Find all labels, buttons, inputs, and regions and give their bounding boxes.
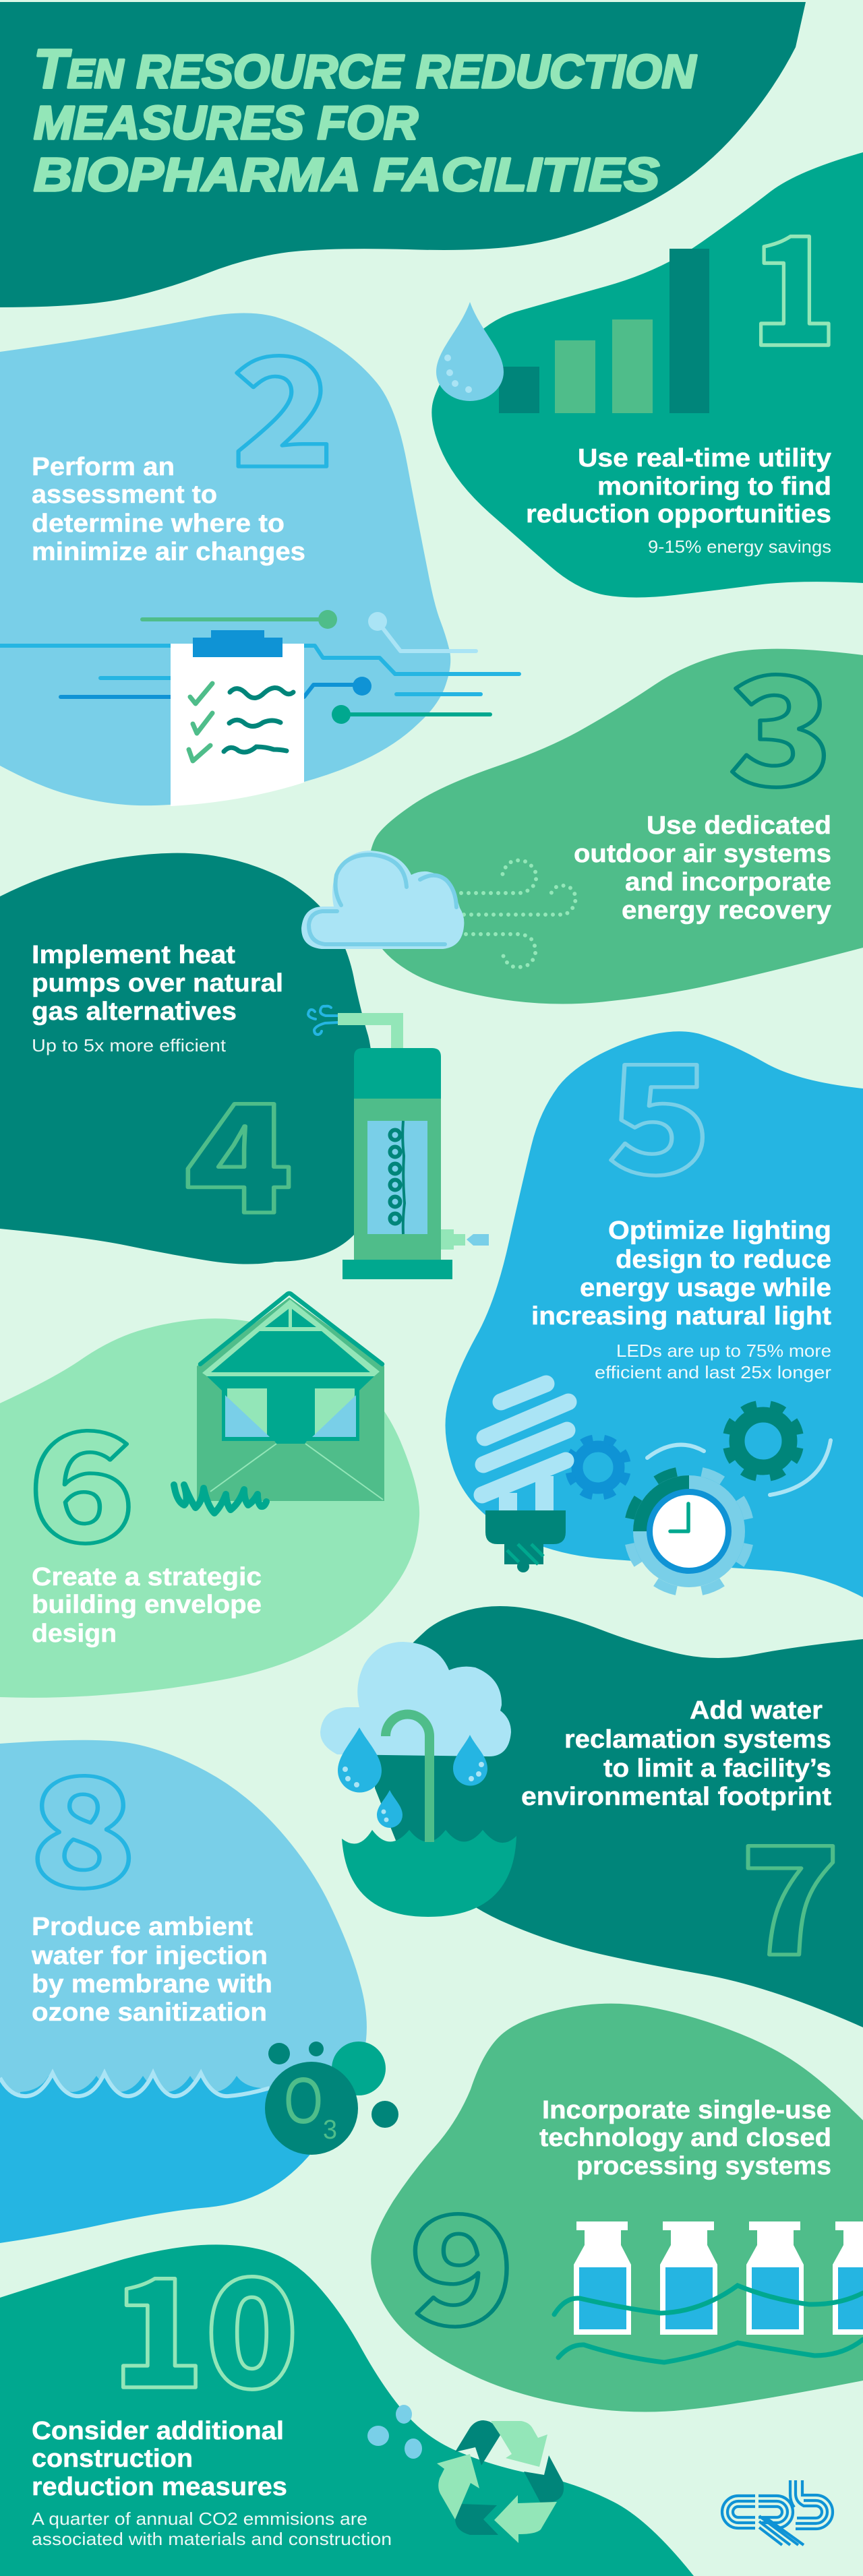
icon: vials (574, 2221, 863, 2335)
icon: wavy fluid lines (554, 2286, 863, 2362)
subtext 4: Up to 5x more efficient (32, 1035, 227, 1055)
heading 3 (574, 811, 831, 925)
heading 7: environmental footprint (521, 1783, 831, 1811)
panel: measure 8 (0, 1713, 398, 2243)
icon: dotted air flow (461, 860, 575, 967)
subtext 1: 9-15% energy savings (648, 536, 831, 557)
number 3: 3 (728, 611, 833, 828)
blob 10 (0, 2244, 694, 2576)
icon: light bulb (482, 1384, 568, 1572)
title: TEN RESOURCE REDUCTION (34, 38, 696, 100)
blob 7 (375, 1606, 863, 2027)
icon: grass scribble (174, 1485, 266, 1513)
icon: cloud (301, 851, 464, 949)
heading 1: Use real-time utility (578, 444, 831, 472)
icon: gears and clock (569, 1405, 831, 1592)
heading 6: Create a strategic (32, 1563, 262, 1591)
blob 4 (0, 853, 378, 1264)
subtext 10: A quarter of annual CO2 emmisions are (32, 2509, 367, 2529)
title: MEASURES FOR (34, 96, 418, 149)
icon: air swirl (308, 1006, 338, 1035)
panel: measure 5 (445, 1000, 863, 1597)
icon: ozone bubbles: O (284, 2064, 323, 2137)
heading 8: by membrane with (32, 1970, 272, 1998)
heading 7: Add water (690, 1696, 823, 1725)
subtext 10 (32, 2509, 392, 2549)
heading 4: gas alternatives (32, 998, 237, 1026)
icon: heat pump (338, 1013, 489, 1279)
water wave line (0, 2073, 270, 2096)
heading 8: ozone sanitization (32, 1998, 267, 2027)
icon: clipboard checklist (171, 630, 304, 806)
icon: ozone bubbles: 3 (323, 2115, 337, 2145)
heading 1: reduction opportunities (526, 500, 831, 528)
number 7: 7 (740, 1781, 841, 1998)
number 5: 5 (607, 1000, 712, 1217)
blob 1 (432, 152, 863, 597)
heading 7: to limit a facility’s (603, 1754, 831, 1783)
heading 4: Implement heat (32, 941, 235, 969)
heading 5: design to reduce (616, 1246, 831, 1274)
heading 7: reclamation systems (564, 1725, 831, 1754)
blob 5 (445, 1031, 863, 1597)
icon: connector lines (0, 610, 519, 724)
water body (0, 2073, 351, 2243)
icon: water drop (436, 302, 504, 401)
panel: measure 10 (0, 2213, 833, 2576)
panel: measure 1 (432, 152, 863, 597)
panel: title (0, 2, 806, 307)
heading 2 (32, 453, 305, 566)
subtext 10: associated with materials and construction (32, 2529, 392, 2549)
heading 9: technology and closed (539, 2124, 831, 2152)
heading 8: water for injection (31, 1942, 268, 1970)
title (34, 38, 696, 201)
icon: cloud (320, 1642, 511, 1756)
heading 8: Produce ambient (32, 1913, 253, 1941)
heading 2: determine where to (32, 510, 285, 538)
panel: measure 2 (0, 293, 519, 806)
heading 3: outdoor air systems (574, 840, 831, 868)
icon: building envelope (197, 1293, 384, 1501)
heading 7 (521, 1696, 831, 1811)
blob 3 (365, 649, 863, 1004)
icon: recycle arrows (437, 2420, 564, 2543)
heading 10: Consider additional (32, 2417, 284, 2445)
blob 2 (0, 313, 450, 805)
number 10: 10 (111, 2213, 299, 2430)
subtext 5: efficient and last 25x longer (595, 1362, 831, 1382)
heading 3: and incorporate (625, 868, 831, 896)
heading 4: pumps over natural (32, 969, 283, 998)
panel: measure 6 (0, 1293, 419, 1698)
panel: measure 9 (371, 2004, 863, 2412)
heading 6: design (32, 1620, 117, 1648)
title: BIOPHARMA FACILITIES (34, 148, 659, 201)
heading 10: construction (32, 2445, 193, 2473)
icon: CRB logo (722, 2480, 833, 2545)
icon: umbrella bowl (342, 1830, 516, 1917)
heading 5: increasing natural light (531, 1302, 831, 1330)
heading 5: Optimize lighting (608, 1217, 831, 1245)
icon: rain drops (338, 1727, 487, 1828)
title background blob (0, 2, 806, 307)
heading 8 (31, 1913, 272, 2027)
heading 10 (32, 2417, 287, 2501)
icon: small drops (367, 2405, 422, 2459)
heading 2: Perform an (32, 453, 175, 481)
heading 3: energy recovery (622, 896, 831, 925)
water back waves (20, 2076, 270, 2099)
heading 5: energy usage while (580, 1274, 831, 1302)
panel: measure 4 (0, 853, 489, 1279)
number 9: 9 (409, 2151, 515, 2368)
bar chart (499, 249, 709, 413)
number 2: 2 (231, 293, 335, 510)
heading 5 (531, 1217, 831, 1330)
number 4: 4 (184, 1039, 293, 1256)
heading 9 (539, 2096, 831, 2180)
blob 8 (0, 1740, 367, 2123)
subtext 5 (595, 1341, 831, 1382)
heading 1 (526, 444, 831, 528)
heading 10: reduction measures (32, 2473, 287, 2501)
number 8: 8 (29, 1713, 137, 1930)
blob 6 (0, 1318, 419, 1698)
heading 2: minimize air changes (32, 538, 305, 566)
heading 3: Use dedicated (647, 811, 831, 840)
icon: umbrella handle (386, 1715, 429, 1842)
panel: measure 7 (320, 1606, 863, 2027)
subtext 5: LEDs are up to 75% more (616, 1341, 831, 1361)
heading 2: assessment to (32, 481, 217, 509)
icon: ozone bubbles (265, 2042, 398, 2155)
number 1: 1 (750, 171, 837, 388)
panel: measure 3 (301, 611, 863, 1004)
heading 9: processing systems (576, 2152, 831, 2180)
heading 1: monitoring to find (597, 472, 831, 501)
heading 9: Incorporate single-use (542, 2096, 831, 2124)
heading 6: building envelope (32, 1591, 262, 1619)
number 6: 6 (28, 1368, 136, 1585)
heading 4 (32, 941, 283, 1026)
blob 9 (371, 2004, 863, 2412)
heading 6 (32, 1563, 262, 1648)
